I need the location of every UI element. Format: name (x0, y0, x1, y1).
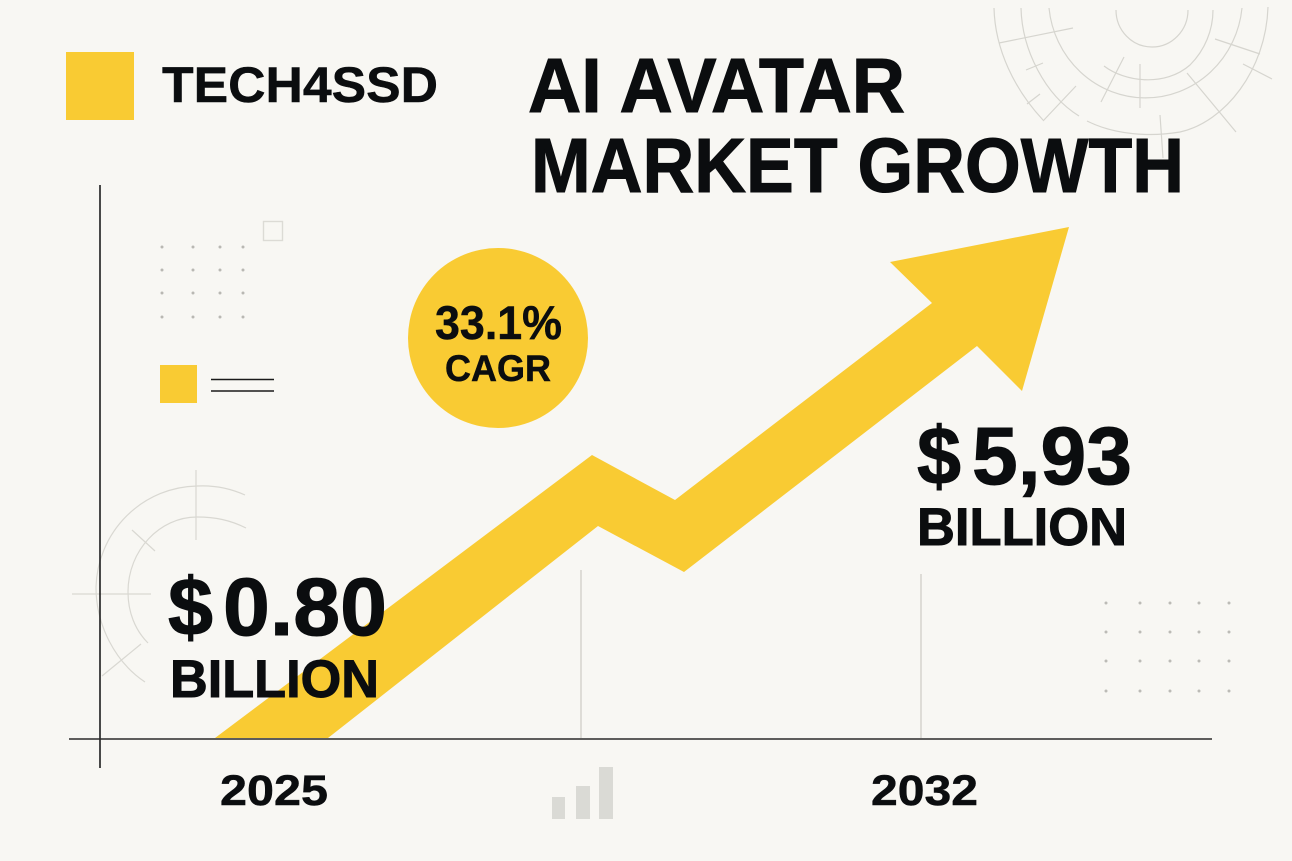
x axis (69, 738, 1212, 740)
decoration: dot grid lower right (1104, 602, 1230, 692)
value label 2032: BILLION (917, 498, 1127, 557)
decoration: concentric arcs lower left (72, 470, 246, 682)
decoration: dot grid upper left (160, 246, 244, 318)
value label 2032: $ (917, 411, 961, 502)
legend: yellow key with lines (160, 365, 274, 403)
title: AI AVATAR (528, 43, 905, 129)
value label 2025: BILLION (170, 650, 379, 709)
year label 2032: 2032 (871, 767, 978, 815)
decoration: small outlined square (264, 222, 282, 240)
year label 2025: 2025 (220, 767, 328, 815)
growth arrow (215, 227, 1069, 738)
value label 2032: 5,93 (972, 411, 1132, 502)
title (528, 43, 1184, 209)
decoration: concentric arcs top right (994, 7, 1272, 158)
value label 2025: $ (168, 562, 213, 653)
CAGR badge: 33.1% (435, 296, 562, 349)
chart axes and year gridlines (100, 185, 921, 768)
icon: small bar chart (552, 767, 613, 819)
CAGR badge (408, 248, 588, 428)
value label 2025 (168, 562, 387, 709)
logo square (66, 52, 134, 120)
value label 2032 (917, 411, 1132, 557)
CAGR badge: CAGR (445, 348, 551, 389)
value label 2025: 0.80 (223, 562, 387, 653)
title: MARKET GROWTH (531, 123, 1184, 209)
brand name: TECH4SSD (162, 57, 438, 113)
